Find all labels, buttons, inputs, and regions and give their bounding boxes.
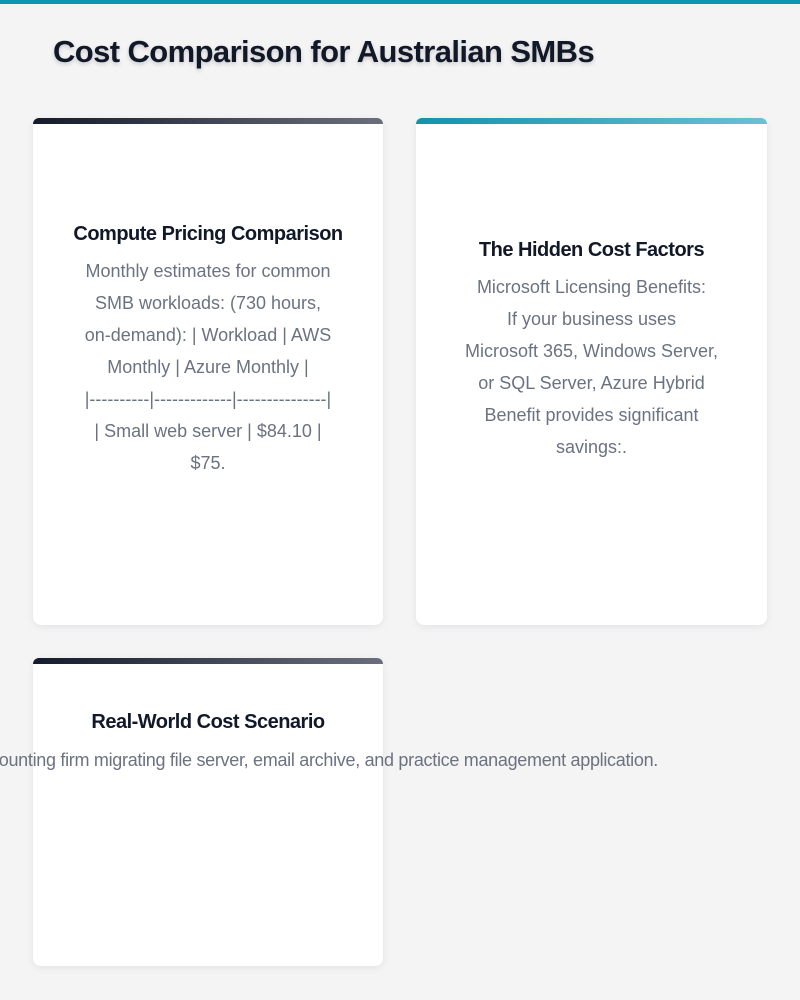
panel: compute pricing <box>33 118 383 625</box>
heading: compute: Compute Pricing Comparison <box>73 223 343 245</box>
text: compute: |----------|-------------|---------------| <box>85 389 331 409</box>
text: hidden: Microsoft 365, Windows Server, <box>465 341 718 361</box>
text: compute: | Small web server | $84.10 | <box>94 421 322 441</box>
text: compute: $75. <box>190 453 226 473</box>
text: compute: Monthly | Azure Monthly | <box>107 357 309 377</box>
text: compute: SMB workloads: (730 hours, <box>95 293 321 313</box>
panel: real-world scenario <box>33 658 383 966</box>
text: compute <box>85 261 331 473</box>
text: hidden: Benefit provides significant <box>484 405 699 425</box>
heading: scenario: Real-World Cost Scenario <box>91 711 325 733</box>
title: Cost Comparison for Australian SMBs <box>53 34 594 69</box>
text: compute: Monthly estimates for common <box>85 261 331 281</box>
text: hidden: savings:. <box>556 437 627 457</box>
heading: hidden: The Hidden Cost Factors <box>479 239 704 261</box>
text: hidden: If your business uses <box>507 309 676 329</box>
text: hidden: Microsoft Licensing Benefits: <box>477 277 706 297</box>
text: compute: on-demand): | Workload | AWS <box>85 325 331 345</box>
text: hidden: or SQL Server, Azure Hybrid <box>478 373 705 393</box>
panel: hidden cost factors <box>416 118 767 625</box>
text: hidden <box>465 277 718 457</box>
